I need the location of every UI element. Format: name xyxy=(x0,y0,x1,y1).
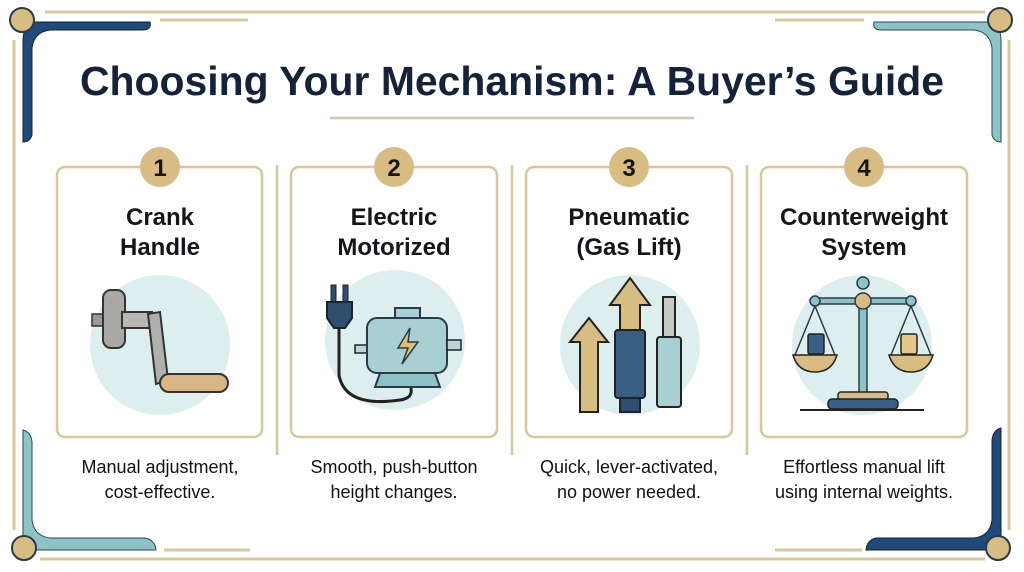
panel: pneumatic xyxy=(526,147,732,502)
dividers xyxy=(277,165,747,455)
heading: counterweight: System xyxy=(821,234,907,261)
text: counterweight description: Effortless manual lift xyxy=(783,457,945,477)
text: pneumatic description: Quick, lever-activated, xyxy=(540,457,718,477)
heading: electric motorized: Motorized xyxy=(337,234,451,261)
heading: electric motorized: Electric xyxy=(351,204,437,231)
icon: crank xyxy=(90,275,230,415)
text: crank description: cost-effective. xyxy=(105,482,215,502)
heading: crank handle: Crank xyxy=(126,204,195,231)
badge 1: 1 xyxy=(153,155,167,182)
badge 2 xyxy=(374,147,414,187)
corner bracket: top-left navy xyxy=(10,8,150,142)
badge 1 xyxy=(140,147,180,187)
panel: electric motorized xyxy=(291,147,497,502)
badge 3: 3 xyxy=(622,155,636,182)
corner bracket: bottom-left teal xyxy=(12,430,156,560)
text: counterweight description: using internal weights. xyxy=(775,482,953,502)
title underline xyxy=(330,117,694,119)
icon: balance scale xyxy=(792,275,933,415)
badge 2: 2 xyxy=(387,155,401,182)
icon: motor and plug xyxy=(325,270,465,410)
corner bracket: bottom-right navy xyxy=(866,428,1010,560)
heading: counterweight: Counterweight xyxy=(780,204,948,231)
heading: pneumatic: Pneumatic xyxy=(568,204,690,231)
title: Choosing Your Mechanism: A Buyer’s Guide xyxy=(80,58,944,104)
icon: gas lift arrows xyxy=(560,275,700,415)
badge 3 xyxy=(609,147,649,187)
badge 4: 4 xyxy=(857,155,871,182)
heading: crank handle: Handle xyxy=(120,234,200,261)
text: crank description: Manual adjustment, xyxy=(81,457,239,477)
heading: pneumatic: (Gas Lift) xyxy=(576,234,682,261)
badge 4 xyxy=(844,147,884,187)
panel: counterweight xyxy=(761,147,967,502)
text: pneumatic description: no power needed. xyxy=(557,482,701,502)
panel: crank handle xyxy=(57,147,262,502)
text: electric description: Smooth, push-button xyxy=(310,457,478,477)
text: electric description: height changes. xyxy=(330,482,458,502)
corner bracket: top-right teal xyxy=(874,8,1012,142)
